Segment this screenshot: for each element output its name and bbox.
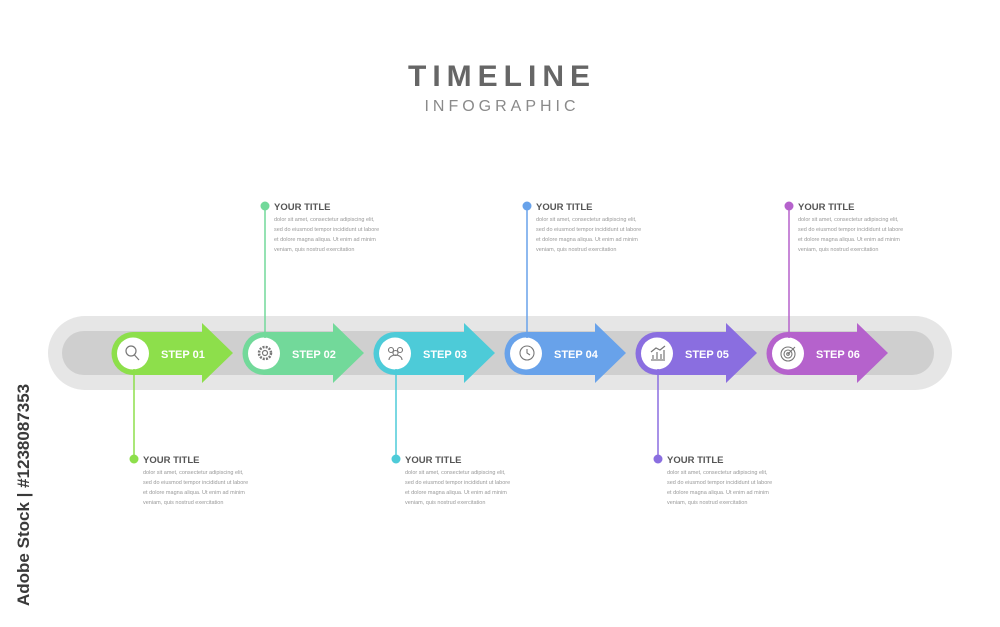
callout: step 05: YOUR TITLE bbox=[667, 455, 723, 466]
callout: step 04: sed do eiusmod tempor incididunt ut labore bbox=[536, 227, 641, 233]
callout: step 02: YOUR TITLE bbox=[274, 202, 330, 213]
callout: step 01 bbox=[130, 369, 248, 506]
step 01: STEP 01 bbox=[161, 349, 205, 361]
step 04: STEP 04 bbox=[554, 349, 599, 361]
callout: step 02: dolor sit amet, consectetur adipiscing elit, bbox=[274, 217, 375, 223]
callout: step 03: veniam, quis nostrud exercitation bbox=[405, 500, 485, 506]
step 05 bbox=[636, 323, 757, 383]
callout: step 01: sed do eiusmod tempor incididunt ut labore bbox=[143, 480, 248, 486]
step 02 bbox=[242, 323, 364, 383]
callout: step 04 bbox=[522, 202, 641, 338]
icon: gear bbox=[259, 347, 271, 359]
icon: target bbox=[781, 347, 795, 361]
callout: step 05 bbox=[654, 369, 772, 506]
callout: step 01: YOUR TITLE bbox=[143, 455, 199, 466]
callout: step 05: sed do eiusmod tempor incididunt ut labore bbox=[667, 480, 772, 486]
callout: step 05: dolor sit amet, consectetur adipiscing elit, bbox=[667, 470, 768, 476]
callout: step 05: et dolore magna aliqua. Ut enim ad minim bbox=[667, 490, 769, 496]
step 02: STEP 02 bbox=[292, 349, 336, 361]
step 03: STEP 03 bbox=[423, 349, 467, 361]
title: INFOGRAPHIC bbox=[424, 98, 580, 115]
timeline track bbox=[48, 316, 952, 390]
step 01 bbox=[112, 323, 233, 383]
callout: step 02: sed do eiusmod tempor incididunt ut labore bbox=[274, 227, 379, 233]
step 06 bbox=[766, 323, 888, 383]
callout: step 06: veniam, quis nostrud exercitation bbox=[798, 247, 878, 253]
callout: step 01: veniam, quis nostrud exercitation bbox=[143, 500, 223, 506]
callout: step 03: et dolore magna aliqua. Ut enim ad minim bbox=[405, 490, 507, 496]
step 03 bbox=[374, 323, 495, 383]
title bbox=[408, 60, 596, 115]
callout: step 01: dolor sit amet, consectetur adipiscing elit, bbox=[143, 470, 244, 476]
icon: clock bbox=[520, 346, 534, 360]
title: TIMELINE bbox=[408, 60, 596, 93]
callout: step 06: YOUR TITLE bbox=[798, 202, 854, 213]
callout: step 04: et dolore magna aliqua. Ut enim ad minim bbox=[536, 237, 638, 243]
callout: step 06: et dolore magna aliqua. Ut enim ad minim bbox=[798, 237, 900, 243]
callout: step 04: dolor sit amet, consectetur adipiscing elit, bbox=[536, 217, 637, 223]
callout: step 03: dolor sit amet, consectetur adipiscing elit, bbox=[405, 470, 506, 476]
callout: step 04: veniam, quis nostrud exercitation bbox=[536, 247, 616, 253]
callout: step 03: sed do eiusmod tempor incididunt ut labore bbox=[405, 480, 510, 486]
callout: step 06: dolor sit amet, consectetur adipiscing elit, bbox=[798, 217, 899, 223]
icon: chart bbox=[651, 346, 665, 360]
callout: step 06 bbox=[784, 202, 903, 338]
callout: step 04: YOUR TITLE bbox=[536, 202, 592, 213]
watermark label: Adobe Stock | #1238087353 bbox=[14, 384, 33, 606]
callout: step 05: veniam, quis nostrud exercitation bbox=[667, 500, 747, 506]
icon: magnifier bbox=[126, 346, 139, 360]
callout: step 03: YOUR TITLE bbox=[405, 455, 461, 466]
callout: step 02: veniam, quis nostrud exercitation bbox=[274, 247, 354, 253]
callout: step 02 bbox=[260, 202, 379, 338]
callout: step 02: et dolore magna aliqua. Ut enim ad minim bbox=[274, 237, 376, 243]
callout: step 06: sed do eiusmod tempor incididunt ut labore bbox=[798, 227, 903, 233]
step 06: STEP 06 bbox=[816, 349, 860, 361]
step 04 bbox=[504, 323, 626, 383]
callout: step 01: et dolore magna aliqua. Ut enim ad minim bbox=[143, 490, 245, 496]
step 05: STEP 05 bbox=[685, 349, 729, 361]
callout: step 03 bbox=[392, 369, 510, 506]
icon: team bbox=[388, 348, 402, 360]
